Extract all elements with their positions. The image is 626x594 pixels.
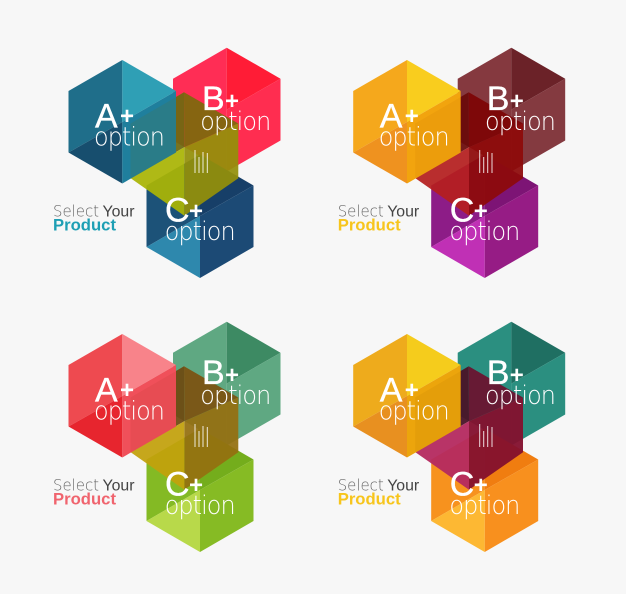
hexagon B [173, 48, 280, 172]
hexagon B [458, 48, 565, 172]
caption [53, 202, 135, 235]
caption: Your [102, 478, 135, 494]
hexagon B [173, 322, 280, 446]
label A: + [120, 377, 134, 404]
label A: + [120, 103, 134, 130]
caption [338, 476, 420, 509]
hexagon A [68, 60, 176, 184]
label A: option [94, 123, 164, 153]
label A [94, 372, 164, 427]
label A: A [380, 98, 403, 136]
hexagon C [146, 428, 254, 552]
label C: C [165, 466, 190, 504]
label B: B [202, 354, 225, 392]
panel: amber teal orange [338, 322, 565, 552]
hexagon C [431, 428, 538, 552]
caption: Product [53, 217, 117, 235]
hexagon A [353, 60, 461, 184]
label B: + [510, 362, 524, 389]
label C: option [165, 491, 235, 521]
label C [449, 466, 519, 521]
label A: option [94, 397, 164, 427]
label B: + [225, 362, 239, 389]
label C: C [165, 192, 190, 230]
icon: bars [195, 150, 207, 173]
label C: option [449, 217, 519, 247]
hexagon C [431, 154, 538, 278]
label A: A [95, 98, 118, 136]
label B: option [485, 381, 555, 411]
label B: option [200, 381, 270, 411]
hexagon centre overlay [131, 366, 238, 490]
label C: C [450, 192, 474, 230]
icon: bars [195, 424, 207, 447]
hexagon C [146, 154, 254, 278]
caption [338, 202, 420, 235]
label C: + [474, 472, 488, 499]
caption: Select [53, 476, 99, 494]
caption: Product [338, 491, 401, 509]
caption: Select [53, 202, 99, 220]
hexagon centre overlay [415, 366, 523, 490]
caption: Your [387, 204, 420, 220]
caption: Product [53, 491, 117, 509]
label C: option [449, 491, 519, 521]
label C [449, 192, 519, 247]
icon: bars [480, 424, 492, 447]
label A: + [405, 377, 419, 404]
label B [200, 354, 270, 411]
label A: option [379, 397, 449, 427]
panel: amber maroon purple [338, 48, 565, 278]
hexagon centre overlay [131, 92, 238, 216]
label C: + [474, 198, 488, 225]
label C [165, 466, 235, 521]
label B: B [487, 354, 509, 392]
hexagon A [353, 334, 461, 458]
caption: Product [338, 217, 401, 235]
hexagon centre overlay [415, 92, 523, 216]
label A: A [380, 372, 403, 410]
panel: red green lime [53, 322, 280, 552]
label C [165, 192, 235, 247]
label A [94, 98, 164, 153]
label B: + [510, 88, 524, 115]
label B: B [487, 80, 509, 118]
label A [379, 98, 449, 153]
panel: teal red navy [53, 48, 280, 278]
label B: B [202, 80, 225, 118]
caption: Your [102, 204, 135, 220]
hexagon B [458, 322, 565, 446]
caption: Your [387, 478, 420, 494]
label A: A [95, 372, 118, 410]
label B [200, 80, 270, 137]
label C: + [189, 472, 203, 499]
label B: + [225, 88, 239, 115]
caption [53, 476, 135, 509]
label C: C [450, 466, 474, 504]
label B: option [485, 107, 555, 137]
caption: Select [338, 202, 384, 220]
label B: option [200, 107, 270, 137]
label C: option [165, 217, 235, 247]
label A: option [379, 123, 449, 153]
label B [485, 354, 555, 411]
icon: bars [480, 150, 492, 173]
label C: + [189, 198, 203, 225]
label B [485, 80, 555, 137]
label A [379, 372, 449, 427]
label A: + [405, 103, 419, 130]
caption: Select [338, 476, 384, 494]
hexagon A [68, 334, 176, 458]
